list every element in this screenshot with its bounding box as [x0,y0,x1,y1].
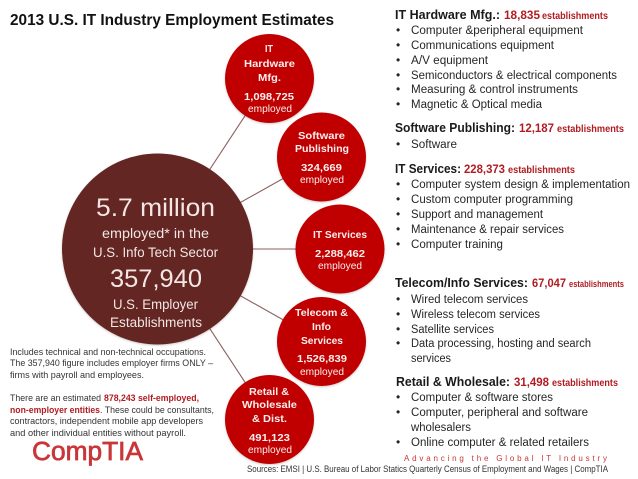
panel: Software Publishing establishments: • [396,137,400,151]
panel: IT Hardware Mfg. establishments: • [396,82,400,96]
panel: IT Hardware Mfg. establishments: IT Hardware Mfg.: [395,7,500,22]
panel: Telecom/Info Services establishments [395,275,624,365]
circle: IT Services: 2,288,462 [315,248,365,260]
panel: IT Services establishments: Support and management [411,209,544,221]
circle: IT Services [296,204,384,294]
central circle: 5.7 million employed: 357,940 [110,265,202,293]
central circle: 5.7 million employed: 5.7 million [96,194,215,222]
panel: Telecom/Info Services establishments: • [396,322,400,336]
panel: Telecom/Info Services establishments: establishments [569,279,624,289]
panel: IT Services establishments: Computer training [411,239,503,251]
panel: IT Hardware Mfg. establishments: • [396,23,400,37]
note: self-employed entities [10,393,214,439]
panel: IT Hardware Mfg. establishments: Computer &peripheral equipment [411,25,584,37]
circle: Retail and Wholesale and Distribution: & Dist. [252,413,287,425]
panel: IT Services establishments: 228,373 [464,162,505,176]
circle: Telecom and Info Services: 1,526,839 [297,353,347,365]
panel: Telecom/Info Services establishments: • [396,336,400,350]
panel: Retail and Wholesale establishments: wholesalers [410,422,471,434]
circle: Software Publishing: Publishing [295,143,349,155]
note: self-employed entities: . These could be consultants, [100,405,214,416]
note: self-employed entities: and other individual entities without payroll. [10,428,186,439]
panel: Telecom/Info Services establishments: • [396,307,400,321]
panel: IT Hardware Mfg. establishments: Magnetic & Optical media [411,99,543,111]
central circle: 5.7 million employed: U.S. Info Tech Sector [93,245,218,260]
central circle: 5.7 million employed [62,154,253,344]
panel: Retail and Wholesale establishments: Retail & Wholesale: [396,374,510,389]
panel: IT Services establishments: IT Services: [395,161,461,176]
circle: Telecom and Info Services: Telecom & [295,307,348,319]
panel: IT Services establishments: • [396,177,400,191]
panel: IT Services establishments [395,161,630,251]
circle: IT Hardware Mfg.: 1,098,725 [244,91,294,103]
panel: Retail and Wholesale establishments: Computer & software stores [411,392,553,404]
panel: IT Hardware Mfg. establishments: establishments [542,11,608,22]
panel: Software Publishing establishments: Software [411,139,457,151]
circle: Telecom and Info Services: employed [300,366,344,378]
panel: Retail and Wholesale establishments: • [396,435,400,449]
panel: IT Hardware Mfg. establishments: • [396,68,400,82]
connector lines [158,78,340,420]
panel: Retail and Wholesale establishments: • [396,405,400,419]
circle: Software Publishing [277,112,366,202]
central circle: 5.7 million employed: Establishments [110,315,202,330]
panel: Telecom/Info Services establishments: Wired telecom services [411,294,528,306]
panel: IT Services establishments: establishments [508,165,575,176]
panel: Telecom/Info Services establishments: Telecom/Info Services: [395,275,528,290]
circle: IT Hardware Mfg.: IT [265,43,273,55]
central circle: 5.7 million employed: U.S. Employer [113,297,198,312]
circle: Software Publishing: 324,669 [301,162,342,174]
note: self-employed entities: non-employer entities [10,405,100,416]
panel: Telecom/Info Services establishments: Satellite services [411,324,494,336]
panel: Telecom/Info Services establishments: 67,047 [532,276,566,290]
circle: IT Services: employed [318,260,362,272]
panel: IT Services establishments: Custom computer programming [411,194,573,206]
circle: IT Hardware Mfg.: Mfg. [258,72,281,84]
panel: Retail and Wholesale establishments: • [396,390,400,404]
circle: Retail and Wholesale and Distribution: Wholesale [242,399,297,411]
panel: IT Hardware Mfg. establishments: Communications equipment [411,40,555,52]
circle: Software Publishing: employed [300,174,344,186]
panel: Software Publishing establishments: 12,187 [519,121,554,135]
circle: Telecom and Info Services: Services [301,335,343,347]
circle: Software Publishing: Software [298,130,345,142]
panel: Retail and Wholesale establishments [396,374,618,449]
circle: Retail and Wholesale and Distribution: Retail & [249,386,289,398]
logo: CompTIA: CompTIA [32,438,143,466]
panel: Software Publishing establishments: Software Publishing: [395,120,515,135]
panel: IT Hardware Mfg. establishments: • [396,38,400,52]
panel: IT Hardware Mfg. establishments: Semiconductors & electrical components [411,70,617,82]
panel: IT Hardware Mfg. establishments [395,7,617,111]
panel: IT Hardware Mfg. establishments: Measuring & control instruments [411,84,578,96]
circle: Retail and Wholesale and Distribution [225,375,314,464]
panel: Retail and Wholesale establishments: Online computer & related retailers [411,437,589,449]
panel: Telecom/Info Services establishments: services [411,353,451,365]
circle: Telecom and Info Services: Info [312,321,331,333]
note: technical occupations: firms with payroll and employees. [10,370,144,381]
note: technical occupations: The 357,940 figure includes employer firms ONLY – [10,358,214,369]
panel: Telecom/Info Services establishments: Wireless telecom services [411,309,540,321]
circle: IT Hardware Mfg.: employed [248,103,292,115]
panel: IT Services establishments: Computer system design & implementation [411,179,630,191]
panel: IT Hardware Mfg. establishments: • [396,53,400,67]
note: self-employed entities: 878,243 self-employed, [104,393,199,404]
panel: Retail and Wholesale establishments: establishments [552,378,618,389]
panel: IT Services establishments: • [396,207,400,221]
panel: IT Services establishments: • [396,237,400,251]
title: 2013 U.S. IT Industry Employment Estimates [10,12,334,29]
circle: Telecom and Info Services [277,297,366,386]
panel: IT Services establishments: • [396,192,400,206]
panel: IT Hardware Mfg. establishments: 18,835 [504,8,540,22]
tagline: Advancing the Global IT Industry [404,454,607,463]
note: technical occupations: Includes technical and non-technical occupations. [10,347,206,358]
panel: Software Publishing establishments: establishments [557,124,624,135]
circle: IT Hardware Mfg.: Hardware [244,58,295,70]
panel: Software Publishing establishments [395,120,624,151]
circle: IT Hardware Mfg. [225,34,314,123]
circle: IT Services: IT Services [313,229,367,241]
panel: Telecom/Info Services establishments: • [396,292,400,306]
panel: Telecom/Info Services establishments: Data processing, hosting and search [411,338,591,350]
note: self-employed entities: contractors, independent mobile app developers [10,416,203,427]
panel: Retail and Wholesale establishments: 31,498 [514,375,549,389]
panel: IT Services establishments: • [396,222,400,236]
circle: Retail and Wholesale and Distribution: 491,123 [249,432,290,444]
panel: IT Hardware Mfg. establishments: A/V equipment [411,55,489,67]
panel: Retail and Wholesale establishments: Computer, peripheral and software [411,407,588,419]
note: technical occupations [10,347,214,381]
central circle: 5.7 million employed: employed* in the [102,226,209,241]
note: self-employed entities: There are an estimated [10,393,101,404]
panel: IT Hardware Mfg. establishments: • [396,97,400,111]
circle: Retail and Wholesale and Distribution: employed [248,444,292,456]
panel: IT Services establishments: Maintenance & repair services [411,224,564,236]
